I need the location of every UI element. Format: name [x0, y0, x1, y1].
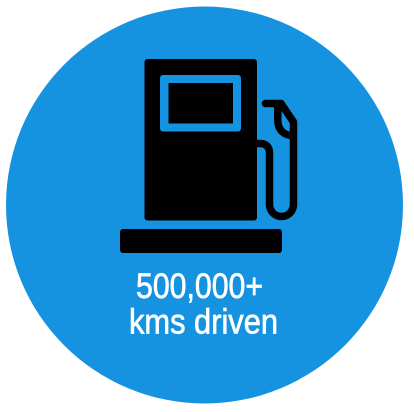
pump body: [144, 59, 257, 220]
hose and nozzle: [257, 104, 294, 217]
icon: fuel pump: [120, 59, 294, 253]
pump display: [160, 75, 241, 132]
label: 500,000+: 500,000+: [136, 266, 263, 306]
pump base: [120, 229, 282, 253]
label: kms driven: kms driven: [129, 302, 278, 342]
